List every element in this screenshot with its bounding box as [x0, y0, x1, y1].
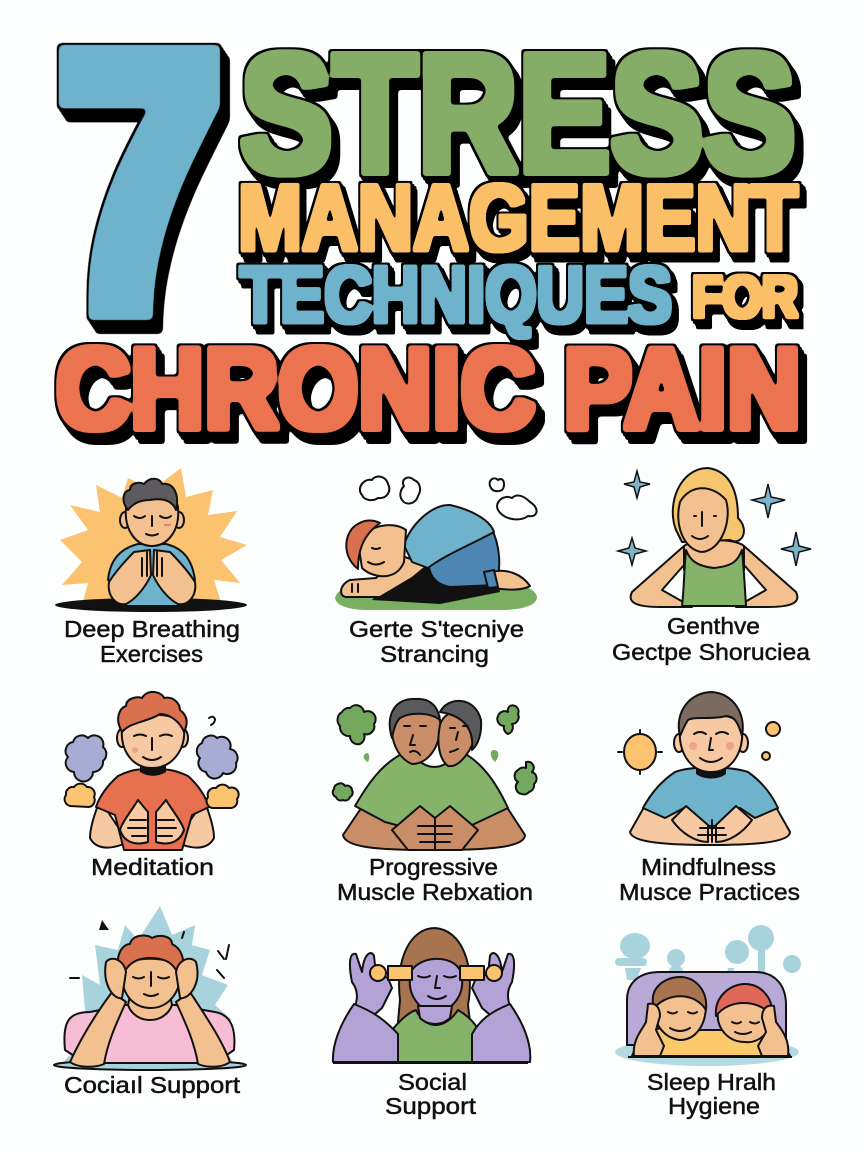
label: gentle stretching: Gerte S'tecniye — [349, 616, 524, 642]
label: sleep health hygiene: Sleep Hralh — [647, 1069, 776, 1095]
title words: chronic pain: CHRONIC PAIN — [56, 326, 801, 453]
label: cocial support: Cociaıl Support — [64, 1072, 241, 1098]
label: deep breathing exercises: Deep Breathing — [64, 616, 240, 642]
illustration: person massaging ears with spiky backdrop — [54, 906, 246, 1070]
illustration: two-headed figure with clovers — [333, 699, 537, 850]
label: progressive muscle relaxation: Progressive — [369, 854, 498, 880]
label: gentle stretching: Strancing — [380, 641, 489, 667]
illustration: person meditating with clouds — [65, 692, 239, 850]
illustration: child pose on mat with clouds — [335, 477, 537, 610]
label: gentle shoulder: Gectpe Shoruciea — [612, 639, 811, 665]
illustration: person breathing with sunburst — [55, 468, 247, 612]
label: social support: Support — [385, 1093, 477, 1119]
illustration: purple person with yellow device — [333, 928, 530, 1064]
panel: meditation — [65, 692, 239, 880]
panel: cocial support — [54, 906, 246, 1098]
title word: for: FOR — [692, 265, 798, 330]
panel: mindfulness muscle practices — [618, 692, 800, 905]
label: mindfulness muscle practices: Mindfulness — [641, 854, 776, 880]
label: mindfulness muscle practices: Musce Practices — [619, 879, 800, 905]
label: deep breathing exercises: Exercises — [100, 641, 203, 667]
panel: sleep health hygiene — [615, 925, 801, 1119]
panel: deep breathing exercises — [55, 468, 247, 667]
title — [56, 0, 801, 453]
panel: social support — [333, 928, 530, 1119]
label: sleep health hygiene: Hygiene — [668, 1093, 760, 1119]
illustration: person with suns — [618, 692, 790, 845]
illustration: woman with sparkles — [618, 468, 811, 607]
panel: gentle shoulder — [612, 468, 811, 665]
panel: gentle stretching — [335, 477, 537, 667]
title word: techniques: TECHNIQUES — [240, 250, 672, 339]
label: social support: Social — [398, 1069, 467, 1095]
label: gentle shoulder: Genthve — [667, 613, 760, 639]
label: meditation: Meditation — [91, 854, 214, 880]
illustration: two people in bed with clouds — [615, 925, 801, 1066]
panel: progressive muscle relaxation — [333, 699, 537, 905]
label: progressive muscle relaxation: Muscle Rebxation — [337, 879, 533, 905]
